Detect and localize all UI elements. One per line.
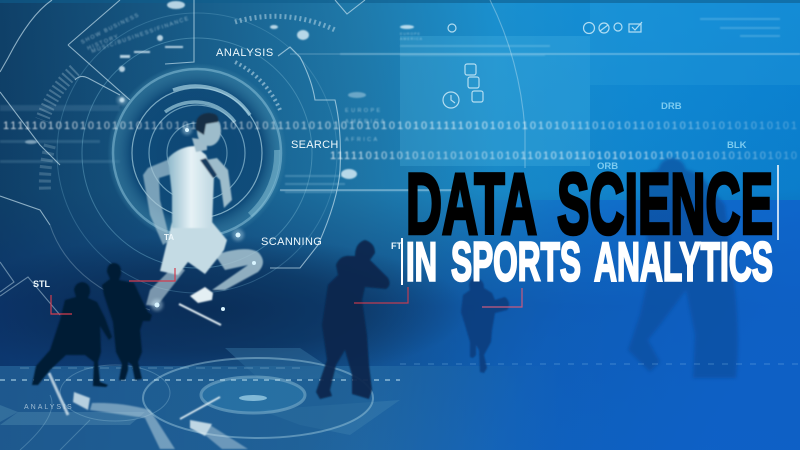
small hud text: SHOW BUSINESS xyxy=(80,12,141,46)
world map marks xyxy=(25,1,414,179)
silhouette: centre player holding ball xyxy=(316,240,390,399)
hud labels: ANALYSIS xyxy=(216,47,274,59)
small hud text: MUSIC/BUSINESS/FINANCE xyxy=(91,16,191,55)
data grid texture xyxy=(0,18,800,193)
stat labels on the right: ORB xyxy=(597,161,618,172)
large faded silhouette xyxy=(628,158,738,378)
binary data strings: 1111101010101011010101010110101011010101010101010101010101010 xyxy=(330,150,797,162)
binary data strings xyxy=(3,120,797,162)
glow nodes xyxy=(117,95,256,311)
hud labels: SCANNING xyxy=(261,236,322,248)
stat labels on the right: DRB xyxy=(661,101,682,112)
runner: shorts xyxy=(160,222,227,275)
small hud text: EUROPE xyxy=(400,32,421,36)
small hud text: AFRICA xyxy=(345,137,380,143)
title: IN SPORTS ANALYTICS: SPORTS xyxy=(451,230,581,292)
small hud text: EUROPE xyxy=(345,108,383,114)
silhouette: distant dribbler xyxy=(461,278,509,373)
small hud text xyxy=(80,12,423,143)
hud labels: ANALYSIS xyxy=(24,404,74,411)
runner: head xyxy=(197,116,221,146)
runner: front arm xyxy=(206,158,232,208)
runner: shoe xyxy=(190,287,213,303)
runner reflection on floor xyxy=(49,373,248,449)
silhouette: player with ball xyxy=(102,263,152,380)
hud outline strokes xyxy=(0,0,800,315)
runner: tie xyxy=(200,158,217,178)
binary data strings: 11111010101010101011101010101010101110101010101010101011111010101010101011101010110101011010101010101 xyxy=(3,120,797,132)
title: IN SPORTS ANALYTICS: IN xyxy=(406,230,437,292)
hud labels: TA xyxy=(164,233,174,242)
title: DATA SCIENCE xyxy=(406,156,773,252)
hud icons xyxy=(443,22,642,108)
runner: back leg xyxy=(146,265,185,306)
title: DATA SCIENCE: DATA xyxy=(406,156,537,252)
red callout lines xyxy=(51,268,522,314)
silhouette: defender under STL xyxy=(32,282,112,387)
runner: shirt xyxy=(168,146,214,228)
hud labels: SEARCH xyxy=(291,139,339,151)
hud labels xyxy=(24,47,402,411)
stat labels on the right xyxy=(597,101,747,172)
hud labels: STL xyxy=(33,279,51,289)
runner: back arm xyxy=(143,158,178,245)
title frame xyxy=(402,165,778,286)
title: IN SPORTS ANALYTICS xyxy=(406,230,773,292)
runner: hair xyxy=(196,113,218,135)
small hud text: HISTORY xyxy=(87,34,120,52)
radar rings xyxy=(42,13,337,293)
floor panels xyxy=(0,348,800,450)
runner figure xyxy=(143,113,263,325)
small hud text: AMERICA xyxy=(400,37,423,41)
small hud text: AMERICA xyxy=(345,119,387,125)
runner: neck xyxy=(192,138,207,152)
runner: front leg xyxy=(212,249,263,290)
runner: cleat stick xyxy=(179,304,221,325)
hud labels: FT xyxy=(391,241,402,251)
stat labels on the right: BLK xyxy=(727,140,747,151)
